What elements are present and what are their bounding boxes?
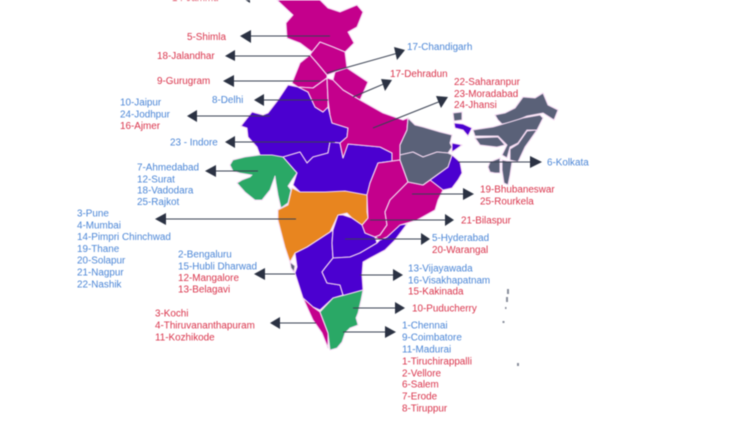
labels: Karnataka cities: 2-Bengaluru <box>178 250 232 260</box>
Andaman and Nicobar islands <box>502 289 519 366</box>
labels: Gujarat cities: 25-Rajkot <box>137 197 180 208</box>
labels: Tamil Nadu cities: 1-Tiruchirappalli <box>402 356 472 368</box>
arrows from states to city lists <box>155 0 542 338</box>
central and southern states in purple <box>241 85 472 310</box>
arrow: Bhubaneswar <box>412 188 474 200</box>
labels: Uttar Pradesh cities: 22-Saharanpur <box>454 77 521 88</box>
arrow: Gurugram <box>223 75 320 87</box>
labels: Andhra Pradesh cities: 13-Vijayawada <box>408 264 473 274</box>
arrow: Uttar Pradesh <box>373 96 448 128</box>
arrow: Hyderabad <box>345 233 430 245</box>
labels: Telangana cities <box>432 233 489 256</box>
labels: Uttar Pradesh cities <box>454 77 521 111</box>
label: Puducherry: 10-Puducherry <box>412 304 477 314</box>
arrow: Dehradun <box>353 79 392 97</box>
labels: Rajasthan cities <box>120 98 171 132</box>
labels: Maharashtra cities: 22-Nashik <box>77 280 122 290</box>
arrow: Delhi <box>254 94 328 106</box>
labels: Kerala cities: 3-Kochi <box>155 308 188 320</box>
labels: Karnataka cities: 13-Belagavi <box>178 284 230 296</box>
label: Delhi: 8-Delhi <box>212 95 243 106</box>
labels: Tamil Nadu cities: 7-Erode <box>402 392 438 402</box>
arrow: Pune <box>155 213 296 225</box>
labels: Uttar Pradesh cities: 24-Jhansi <box>454 100 497 111</box>
arrow: Jammu <box>241 0 250 3</box>
labels: Odisha cities <box>480 184 555 208</box>
labels: Maharashtra cities: 14-Pimpri Chinchwad <box>77 232 171 243</box>
arrow: Jalandhar <box>225 50 310 61</box>
labels: Tamil Nadu cities: 9-Coimbatore <box>402 332 462 344</box>
label: Gurugram: 9-Gurugram <box>157 76 210 87</box>
labels: Karnataka cities: 12-Mangalore <box>178 273 239 284</box>
labels: Maharashtra cities <box>77 208 171 290</box>
labels: Maharashtra cities: 3-Pune <box>77 208 109 220</box>
labels: Tamil Nadu cities <box>402 320 472 414</box>
labels: Maharashtra cities: 19-Thane <box>77 244 120 255</box>
arrow: Kolkata <box>458 156 542 168</box>
labels: Tamil Nadu cities: 1-Chennai <box>402 320 448 332</box>
arrow: Vijayawada <box>360 269 403 281</box>
labels: Karnataka cities: 15-Hubli Dharwad <box>178 262 257 272</box>
arrow: Puducherry <box>353 302 405 314</box>
labels: Maharashtra cities: 21-Nagpur <box>77 268 124 278</box>
Tamil Nadu in green <box>320 290 363 350</box>
arrow: Bengaluru <box>254 268 295 280</box>
labels: Odisha cities: 25-Rourkela <box>480 196 534 208</box>
label: Dehradun: 17-Dehradun <box>390 69 448 80</box>
label: Chandigarh: 17-Chandigarh <box>407 42 472 53</box>
labels: Maharashtra cities: 4-Mumbai <box>77 220 121 232</box>
arrow: Bilaspur <box>370 214 454 226</box>
map of India by state <box>230 0 558 366</box>
arrow: Shimla <box>240 30 330 43</box>
label: Shimla: 5-Shimla <box>187 32 226 43</box>
label: Indore: 23 - Indore <box>170 138 218 148</box>
labels: Andhra Pradesh cities: 16-Visakhapatnam <box>408 276 490 286</box>
labels: Uttar Pradesh cities: 23-Moradabad <box>454 89 518 100</box>
labels: Tamil Nadu cities: 11-Madurai <box>402 344 451 356</box>
labels: Karnataka cities <box>178 250 257 296</box>
labels: Andhra Pradesh cities <box>408 264 490 298</box>
labels: Tamil Nadu cities: 6-Salem <box>402 380 439 390</box>
labels: Rajasthan cities: 24-Jodhpur <box>120 110 171 120</box>
label: Bilaspur: 21-Bilaspur <box>461 216 512 226</box>
arrow: Chennai <box>343 326 396 338</box>
labels: Telangana cities: 5-Hyderabad <box>432 233 489 244</box>
labels: Kerala cities: 4-Thiruvananthapuram <box>155 320 255 332</box>
labels: Kerala cities <box>155 308 255 344</box>
Gujarat in green <box>230 155 297 208</box>
arrow: Chandigarh <box>327 47 405 73</box>
labels: Odisha cities: 19-Bhubaneswar <box>480 184 555 196</box>
arrow: Indore <box>225 136 335 148</box>
labels: Tamil Nadu cities: 8-Tiruppur <box>402 404 448 414</box>
labels: Rajasthan cities: 16-Ajmer <box>120 121 161 132</box>
labels: Andhra Pradesh cities: 15-Kakinada <box>408 286 464 298</box>
labels: Gujarat cities: 7-Ahmedabad <box>137 162 199 174</box>
labels: Kerala cities: 11-Kozhikode <box>155 332 215 344</box>
Maharashtra in orange <box>278 188 368 262</box>
labels: Gujarat cities: 12-Surat <box>137 174 175 186</box>
arrow: Ahmedabad <box>205 165 258 177</box>
labels: Rajasthan cities: 10-Jaipur <box>120 98 162 108</box>
arrow: Kochi <box>270 317 316 329</box>
label: Jalandhar: 18-Jalandhar <box>157 51 215 62</box>
labels: Telangana cities: 20-Warangal <box>432 245 488 256</box>
label: Kolkata: 6-Kolkata <box>547 158 589 168</box>
arrow: Rajasthan <box>187 110 270 122</box>
labels: Tamil Nadu cities: 2-Vellore <box>402 368 441 380</box>
eastern and north-eastern states in grey <box>290 93 558 272</box>
labels: Maharashtra cities: 20-Solapur <box>77 256 126 266</box>
labels: Gujarat cities: 18-Vadodara <box>137 186 194 196</box>
labels: Gujarat cities <box>137 162 199 208</box>
northern states in magenta <box>277 0 443 348</box>
